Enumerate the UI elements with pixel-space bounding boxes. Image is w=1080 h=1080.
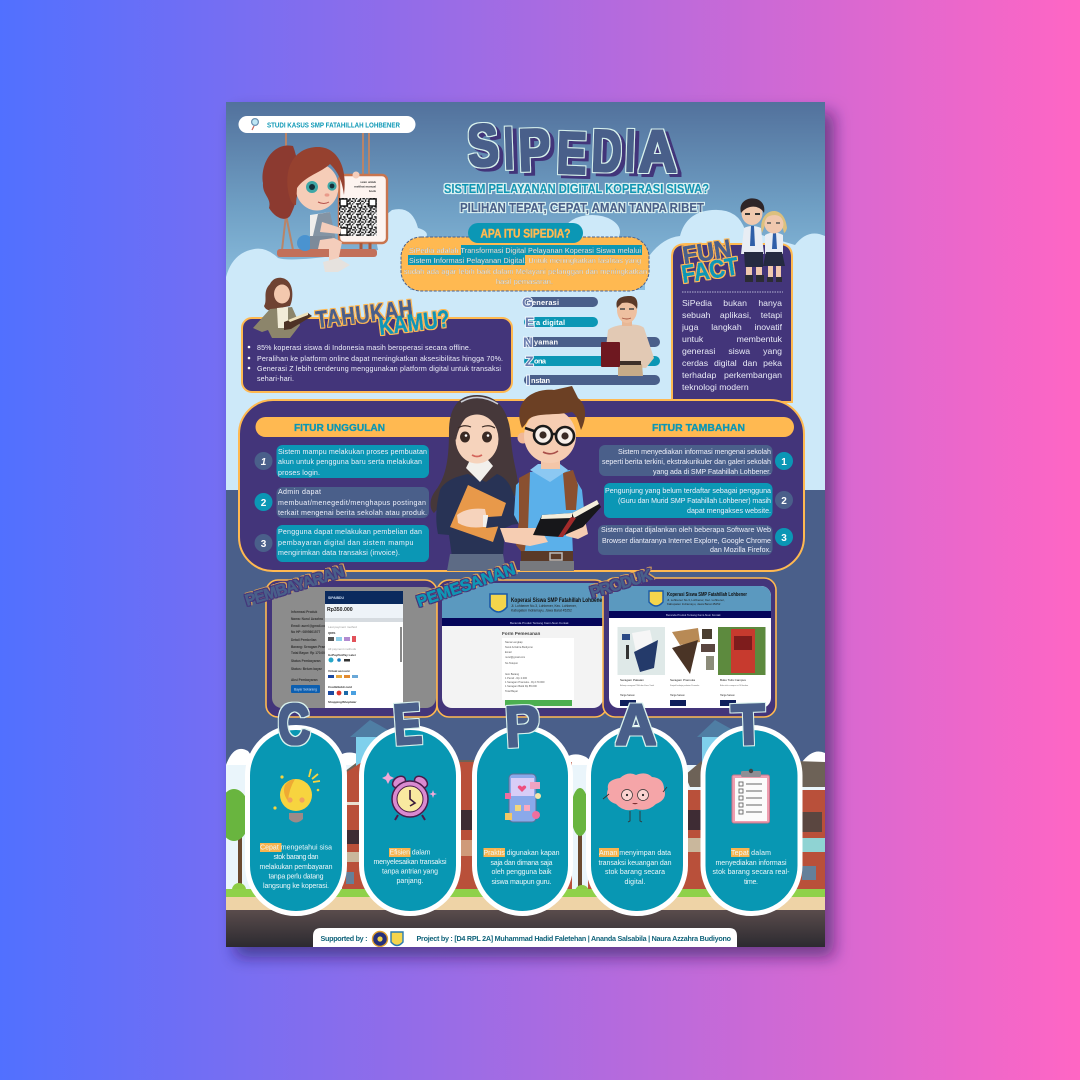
capsule text: praktis: saja dan dimana saja bbox=[490, 860, 553, 867]
capsule text: cepat: langsung ke koperasi. bbox=[263, 883, 329, 890]
screenshot: pemesanan: Item Barang bbox=[505, 672, 520, 676]
icon: magnifier bbox=[252, 119, 258, 130]
trees bbox=[226, 788, 588, 889]
screenshot headings bbox=[243, 561, 655, 611]
GENZI bars: N bbox=[523, 334, 533, 350]
body bbox=[310, 212, 330, 236]
screenshot: produk: Koperasi Siswa SMP Fatahillah Lohbener bbox=[667, 592, 748, 598]
screenshot: pemesanan: 1 Seragam Batik Rp 85.000 bbox=[505, 684, 537, 688]
fitur tambahan items: yang ada di SMP Fatahillah Lohbener. bbox=[653, 468, 771, 476]
footer: Supported by : bbox=[320, 934, 368, 943]
bullet list: Peralihan ke platform online dapat meningkatkan aksesibilitas hingga 70%. bbox=[257, 355, 503, 363]
fitur tambahan items: dan Mozilla Firefox. bbox=[710, 546, 771, 554]
ground: grass, pavement, road bbox=[226, 889, 825, 947]
fitur unggulan items: 1 bbox=[261, 457, 267, 468]
capsule text: cepat bbox=[260, 843, 333, 890]
GENZI bars: nstan bbox=[531, 376, 550, 385]
product 1: Seragam Pakaian bbox=[620, 678, 644, 682]
man with red book bbox=[601, 296, 654, 376]
screenshot: pemesanan: No Telepon bbox=[505, 661, 519, 665]
capsule text: aman: stok barang secara bbox=[605, 869, 665, 876]
fitur tambahan items: 3 bbox=[781, 533, 787, 544]
kids bbox=[740, 198, 787, 282]
students bbox=[430, 386, 601, 571]
product 3 bbox=[718, 627, 766, 697]
screenshot: pembayaran: Barang: Seragam Pramuka bbox=[291, 645, 332, 649]
GENZI bars: ra digital bbox=[533, 318, 565, 327]
fitur tambahan items: 2 bbox=[781, 496, 787, 507]
poster bbox=[218, 102, 825, 948]
panel: fun fact bbox=[672, 198, 792, 402]
swing seat bbox=[277, 249, 377, 257]
footer: Project by : [D4 RPL 2A] Muhammad Hadid Faletehan | Ananda Salsabila | Naura Azzahra Budiyono bbox=[416, 934, 732, 943]
fitur unggulan items: Sistem mampu melakukan proses pembuatan bbox=[278, 448, 427, 456]
ball bbox=[297, 235, 310, 251]
fun fact text: untuk membentuk bbox=[682, 334, 782, 344]
fitur unggulan items: pembayaran digital dan sistem mampu bbox=[278, 539, 414, 547]
product 3: Buku Tulis Campus bbox=[720, 678, 746, 682]
title SIPEDIA: P bbox=[517, 116, 551, 184]
GENZI bars: I bbox=[526, 372, 530, 388]
bullet list bbox=[248, 344, 503, 383]
panel: apa itu sipedia: hasil pemasaran. bbox=[496, 277, 553, 286]
payment modal: Virtual account bbox=[328, 669, 350, 673]
payment modal: QRIS bbox=[328, 631, 335, 635]
heading pill: APA ITU SIPEDIA? bbox=[480, 228, 570, 240]
subtitle: SISTEM PELAYANAN DIGITAL KOPERASI SISWA? bbox=[444, 182, 709, 196]
capsule text: aman bbox=[598, 848, 672, 886]
title SIPEDIA: D bbox=[591, 117, 623, 185]
fitur tambahan items: Browser diantaranya Internet Explore, Google Chrome bbox=[602, 537, 771, 545]
GENZI bars: yaman bbox=[534, 338, 558, 346]
capsule text: cepat: melakukan pembayaran bbox=[260, 864, 333, 871]
cepat letters: P bbox=[503, 693, 542, 760]
GENZI bars: Z bbox=[525, 353, 534, 369]
QR board: scan untuk bbox=[360, 180, 376, 184]
woman with book bbox=[253, 278, 312, 338]
screenshot: pembayaran: Total Bayar: Rp 170.000 bbox=[291, 651, 327, 655]
capsule text: cepat: stok barang dan bbox=[274, 854, 319, 861]
subtitle: PILIHAN TEPAT, CEPAT, AMAN TANPA RIBET bbox=[460, 201, 704, 215]
fitur unggulan items: Pengguna dapat melakukan pembelian dan bbox=[278, 528, 422, 536]
screenshot: pembayaran: Detail Pembelian bbox=[291, 638, 317, 642]
header bar bbox=[256, 417, 794, 437]
screenshot: pembayaran: Email: aurel@gmail.com bbox=[291, 624, 328, 628]
panel: apa itu sipedia: Sistem Informasi Pelayanan Digital. Untuk meningkatkan fasilitas yang bbox=[409, 256, 641, 265]
fitur tambahan items: Pengunjung yang belum terdaftar sebagai pengguna bbox=[605, 487, 771, 495]
school logo bbox=[649, 591, 663, 606]
heading: KAMU? bbox=[377, 306, 451, 341]
screenshot: pemesanan: Beranda Produk Tentang Kami Akun Kontak bbox=[510, 621, 569, 625]
panel: apa itu sipedia: SiPedia adalah Transformasi Digital Pelayanan Koperasi Siswa melalui bbox=[409, 246, 641, 255]
school building background bbox=[226, 720, 825, 895]
fitur unggulan items: proses login. bbox=[278, 469, 320, 477]
screenshot: pemesanan: 1 Pensil - Rp 2.000 bbox=[505, 676, 528, 680]
fun fact text: cerdas digital dan peka bbox=[682, 358, 782, 368]
screenshot headings: PEMESANAN bbox=[415, 561, 518, 611]
panel: fitur bbox=[239, 386, 804, 571]
fun fact text: sebuah aplikasi, tetapi bbox=[682, 310, 782, 320]
screenshot: pemesanan: nurul@gmail.com bbox=[505, 655, 525, 659]
location pill: STUDI KASUS SMP FATAHILLAH LOHBENER bbox=[267, 122, 400, 130]
capsule text: praktis: Praktis digunakan kapan bbox=[484, 850, 560, 857]
panel: apa itu sipedia: sudah ada agar lebih baik dalam Melayani pelanggan dan meningkatkan bbox=[404, 267, 647, 276]
capsule text: cepat: Cepat mengetahui sisa bbox=[260, 844, 332, 852]
school roofs bbox=[340, 758, 825, 787]
fun fact text: juga langkah inovatif bbox=[682, 322, 782, 332]
screenshot: pemesanan: Total Bayar bbox=[505, 689, 518, 693]
GENZI bars bbox=[522, 294, 660, 388]
heading: TAHUKAH bbox=[314, 295, 415, 334]
GENZI bars: enerasi bbox=[532, 298, 559, 307]
screenshot: pemesanan: Nama Lengkap bbox=[505, 640, 523, 644]
screenshot: pembayaran: Informasi Produk bbox=[291, 610, 317, 614]
fitur unggulan items: 2 bbox=[261, 498, 267, 509]
title SIPEDIA: A bbox=[638, 118, 677, 185]
screenshot: pembayaran: Aksi Pembayaran bbox=[291, 678, 318, 682]
capsule text: aman: Aman menyimpan data bbox=[599, 850, 671, 857]
subtitle bbox=[444, 182, 709, 215]
product 1: Harga Satuan bbox=[620, 694, 635, 697]
cepat letters: C bbox=[276, 691, 312, 758]
cepat capsules bbox=[248, 728, 800, 914]
payment modal: All payment methods bbox=[328, 647, 357, 651]
product 1: Belanja seragam PDH dan Kaos Tunik bbox=[620, 685, 654, 687]
QR board: melihat manual bbox=[354, 184, 376, 188]
icon: alarm clock bbox=[382, 772, 437, 820]
heading bbox=[680, 238, 738, 284]
bullet list: 85% koperasi siswa di Indonesia masih beroperasi secara offline. bbox=[257, 344, 471, 352]
payment modal: Rp350.000 bbox=[327, 607, 353, 613]
fitur tambahan items: Sistem dapat dijalankan oleh beberapa Software Web bbox=[601, 526, 771, 534]
capsule text: tepat: Tepat dalam bbox=[731, 850, 771, 857]
screenshot: produk: Jl. Lohbener No.3, Lohbener, Kec. Lohbener, bbox=[667, 598, 725, 602]
bullet list: Generasi Z lebih cenderung menggunakan platform digital untuk transaksi bbox=[257, 365, 501, 373]
screenshot: pemesanan: Koperasi Siswa SMP Fatahillah Lohbener bbox=[511, 597, 604, 604]
capsule text: tepat: stok barang secara real- bbox=[712, 869, 790, 876]
swing ropes bbox=[282, 133, 369, 250]
capsule text: cepat: tanpa perlu datang bbox=[268, 874, 324, 880]
fun fact text bbox=[682, 297, 782, 397]
fitur unggulan items: mengirimkan data transaksi (invoice). bbox=[278, 549, 400, 557]
capsule text: aman: digital. bbox=[624, 879, 646, 886]
product 3: Buku tulis campus isi 58 lembar bbox=[720, 684, 748, 687]
school logo bbox=[490, 594, 507, 612]
product 2: Sunjuk belanja pakaian Pramuka bbox=[670, 685, 700, 687]
product 3: Harga Satuan bbox=[720, 694, 735, 697]
screenshot: pembayaran: Status: Belum bayar bbox=[291, 667, 323, 671]
capsule text: efisien: Efisien dalam bbox=[390, 850, 431, 856]
payment modal: SIPAIBDU bbox=[328, 596, 345, 600]
capsule text: praktis: siswa maupun guru. bbox=[492, 879, 552, 886]
screenshot headings: PRODUK bbox=[588, 567, 655, 602]
fitur unggulan items: 3 bbox=[261, 539, 267, 550]
fitur unggulan items: akun untuk pengguna baru serta melakukan bbox=[278, 458, 422, 466]
capsule text: tepat bbox=[712, 848, 790, 886]
fun fact text: generasi siswa yang bbox=[682, 346, 782, 356]
icon: logo shield bbox=[391, 932, 403, 946]
screenshot: pembayaran: Bayar Sekarang bbox=[294, 688, 317, 692]
title SIPEDIA: S bbox=[465, 111, 501, 180]
title SIPEDIA: I bbox=[625, 117, 636, 184]
screenshot: pembayaran: No HP: 0895601577 bbox=[291, 630, 320, 634]
payment modal bbox=[325, 591, 403, 708]
capsule text: aman: transaksi keuangan dan bbox=[598, 860, 672, 867]
title SIPEDIA bbox=[468, 122, 682, 179]
fitur tambahan items: dapat mengakses website. bbox=[687, 507, 771, 515]
fitur unggulan items: Admin dapat bbox=[278, 488, 321, 496]
icon: clipboard bbox=[732, 769, 770, 823]
cepat letters bbox=[276, 691, 766, 760]
capsule text: efisien bbox=[374, 848, 447, 885]
heading pill bbox=[468, 223, 583, 243]
capsule text: tepat: time. bbox=[744, 879, 758, 886]
cepat letters: E bbox=[391, 691, 424, 758]
product 1 bbox=[618, 627, 665, 697]
capsule text: efisien: panjang. bbox=[396, 878, 424, 885]
QR board: book bbox=[369, 189, 376, 193]
heading: fitur tambahan: FITUR TAMBAHAN bbox=[652, 422, 745, 434]
capsule text: efisien: menyelesaikan transaksi bbox=[374, 859, 447, 866]
screenshot: pembayaran: Nama: Nurul Azzahra bbox=[291, 617, 323, 621]
icon: brain bbox=[603, 773, 667, 822]
fitur tambahan items bbox=[598, 445, 793, 555]
QR board bbox=[339, 175, 387, 243]
sky background bbox=[226, 102, 825, 490]
screenshot headings: PEMBAYARAN bbox=[243, 563, 347, 610]
payment modal: Credit/debit card bbox=[328, 685, 352, 689]
girl on swing with QR code bbox=[263, 133, 387, 272]
heading: fitur unggulan: FITUR UNGGULAN bbox=[294, 422, 385, 434]
panel: tahukah kamu bbox=[242, 278, 512, 392]
cepat letters: A bbox=[615, 693, 657, 758]
screenshot: produk bbox=[603, 578, 776, 717]
screenshot: pemesanan: Form Pemesanan bbox=[502, 631, 540, 636]
fitur tambahan items: Sistem menyediakan informasi mengenai sekolah bbox=[618, 448, 771, 456]
screenshot: pemesanan: Nurul Azzahra Budiyono bbox=[505, 645, 533, 649]
GENZI bars: G bbox=[522, 294, 533, 310]
icon: light bulb bbox=[273, 769, 320, 822]
icon: logo circle bbox=[372, 932, 388, 946]
cepat letters: T bbox=[730, 692, 766, 758]
panel: apa itu sipedia bbox=[401, 223, 649, 291]
fitur tambahan items: 1 bbox=[781, 457, 787, 468]
screenshot: pemesanan: Kabupaten Indramayu, Jawa Barat 45252 bbox=[511, 608, 572, 612]
fun fact text: terhadap perkembangan bbox=[682, 370, 782, 380]
bullet list: sehari-hari. bbox=[257, 375, 294, 383]
boy student bbox=[500, 386, 601, 571]
product 2: Harga Satuan bbox=[670, 694, 685, 697]
location pill bbox=[238, 116, 416, 133]
GENZI bars: E bbox=[525, 314, 534, 330]
heading: FUN bbox=[681, 235, 733, 270]
capsule text: praktis bbox=[484, 848, 560, 886]
title SIPEDIA: E bbox=[556, 119, 588, 187]
GENZI bars: ona bbox=[534, 356, 547, 366]
capsule text: praktis: oleh pengguna baik bbox=[492, 869, 552, 876]
icon: phone apps bbox=[505, 774, 541, 822]
heading: FACT bbox=[680, 252, 740, 289]
screenshot: produk: Kabupaten Indramayu, Jawa Barat 45252 bbox=[667, 602, 721, 606]
fitur unggulan items: membuat/menegedit/menghapus postingan bbox=[278, 499, 426, 507]
ponytail bbox=[263, 146, 299, 219]
screenshot: pembayaran bbox=[266, 580, 437, 717]
fitur unggulan items: terkait mengenai berita sekolah atau produk. bbox=[278, 509, 427, 517]
footer bbox=[313, 928, 737, 948]
title SIPEDIA: I bbox=[503, 115, 514, 182]
girl student bbox=[430, 395, 518, 571]
fun fact text: teknologi modern bbox=[682, 382, 749, 392]
screenshot: pembayaran: Status Pembayaran bbox=[291, 659, 321, 663]
fitur tambahan items: (Guru dan Murid SMP Fatahillah Lohbener) masih bbox=[618, 497, 771, 505]
fitur tambahan items: seperti berita terkini, ekstrakurikuler dan galeri sekolah bbox=[602, 458, 771, 466]
screenshot: pemesanan: 1 Seragam Pramuka - Rp 170.000 bbox=[505, 680, 545, 684]
head bbox=[296, 164, 338, 210]
capsule text: tepat: menyediakan informasi bbox=[716, 860, 787, 867]
screenshot: produk: Beranda Produk Tentang Kami Akun Kontak bbox=[666, 613, 721, 617]
clouds bbox=[226, 209, 825, 290]
screenshot: pemesanan bbox=[437, 580, 607, 717]
product 2 bbox=[670, 628, 715, 697]
payment modal: Last payment method bbox=[328, 625, 357, 629]
screenshot: pemesanan: Jl. Lohbener No.3, Lohbener, Kec. Lohbener, bbox=[511, 604, 577, 608]
fitur unggulan items bbox=[254, 445, 429, 562]
product 2: Seragam Pramuka bbox=[670, 678, 695, 682]
fun fact text: SiPedia bukan hanya bbox=[682, 298, 782, 308]
payment modal: GoPay/GoPay Later bbox=[328, 653, 357, 657]
capsule text: efisien: tanpa antrian yang bbox=[382, 868, 438, 876]
school walls bbox=[342, 762, 825, 895]
screenshot: pemesanan: Email bbox=[505, 650, 512, 654]
payment modal: Shopping/Shoplater bbox=[328, 700, 357, 704]
hand on board bbox=[352, 172, 360, 178]
